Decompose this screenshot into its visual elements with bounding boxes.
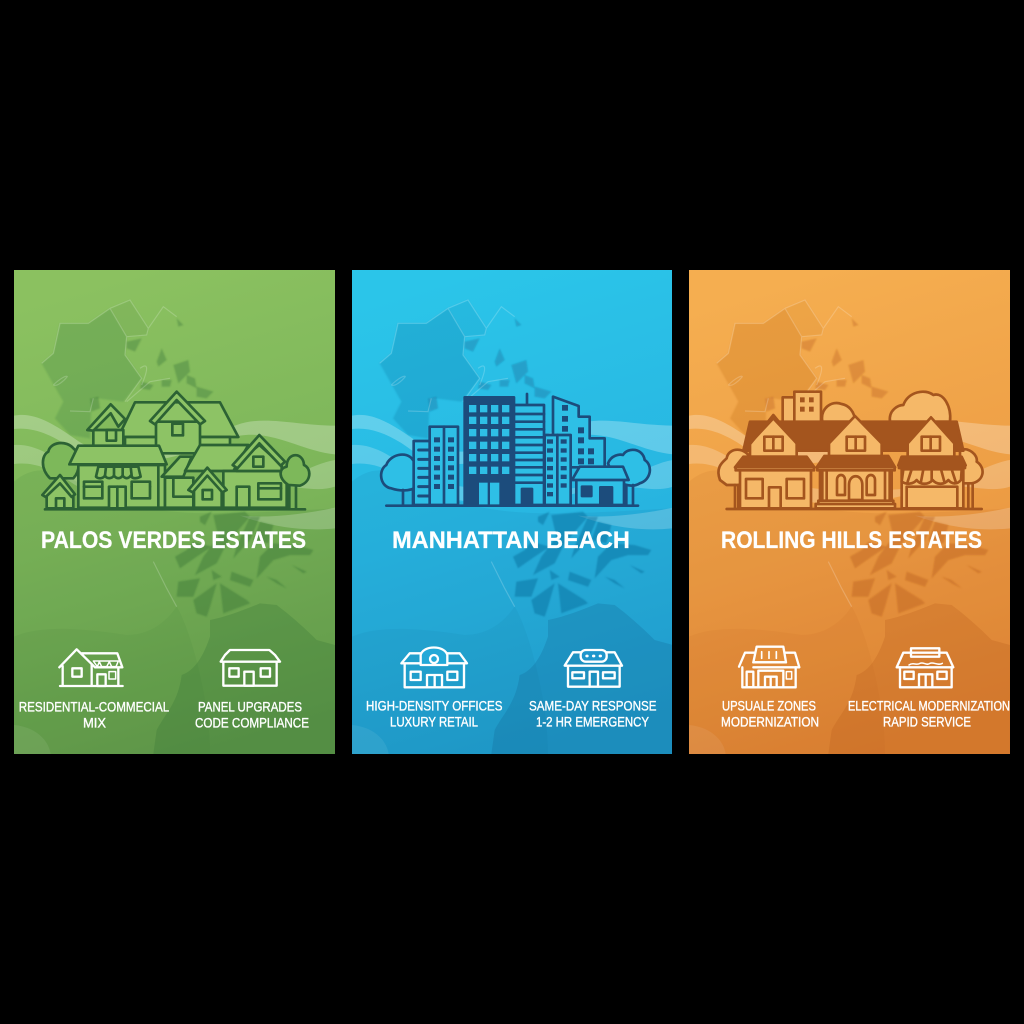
- label: panel upgrades, code compliance: [195, 700, 309, 730]
- icon: domed office building: [401, 647, 467, 687]
- icon: electrical modernization shop: [897, 648, 953, 687]
- title: PALOS VERDES ESTATES: [41, 527, 306, 554]
- label: electrical modernization, rapid service: RAPID SERVICE: [883, 715, 971, 730]
- panel: Rolling Hills Estates: [689, 270, 1010, 754]
- illustration: townhouses and storefronts: [718, 392, 983, 509]
- label: same-day response, 1-2 hr emergency: 1-2 HR EMERGENCY: [536, 715, 649, 730]
- icon: panel upgrades storefront: [221, 650, 280, 686]
- label: electrical modernization, rapid service: [848, 699, 1010, 730]
- label: high-density offices, luxury retail: HIGH-DENSITY OFFICES: [366, 699, 502, 714]
- label: residential-commercial mix: MIX: [83, 716, 106, 730]
- label: upscale zones, modernization: UPSUALE ZONES: [722, 699, 816, 714]
- title: MANHATTAN BEACH: [392, 527, 630, 554]
- illustration: city high-rises: [381, 394, 650, 506]
- label: residential-commercial mix: [19, 700, 170, 730]
- title: ROLLING HILLS ESTATES: [721, 527, 982, 554]
- label: panel upgrades, code compliance: PANEL UPGRADES: [198, 700, 302, 714]
- illustration: neighborhood houses: [42, 392, 309, 509]
- label: residential-commercial mix: RESIDENTIAL-COMMECIAL: [19, 700, 170, 714]
- label: same-day response, 1-2 hr emergency: SAME-DAY RESPONSE: [529, 699, 656, 714]
- panel: Palos Verdes Estates: [14, 270, 335, 754]
- label: same-day response, 1-2 hr emergency: [529, 699, 656, 730]
- icon: upscale zone building: [739, 647, 799, 687]
- icon: same-day response storefront: [565, 650, 622, 687]
- panel: Manhattan Beach: [352, 270, 673, 754]
- label: upscale zones, modernization: [721, 699, 819, 730]
- label: panel upgrades, code compliance: CODE COMPLIANCE: [195, 716, 309, 730]
- label: high-density offices, luxury retail: LUXURY RETAIL: [390, 715, 478, 730]
- label: upscale zones, modernization: MODERNIZATION: [721, 715, 819, 730]
- icon: residential-commercial building: [59, 649, 123, 686]
- label: high-density offices, luxury retail: [366, 699, 502, 730]
